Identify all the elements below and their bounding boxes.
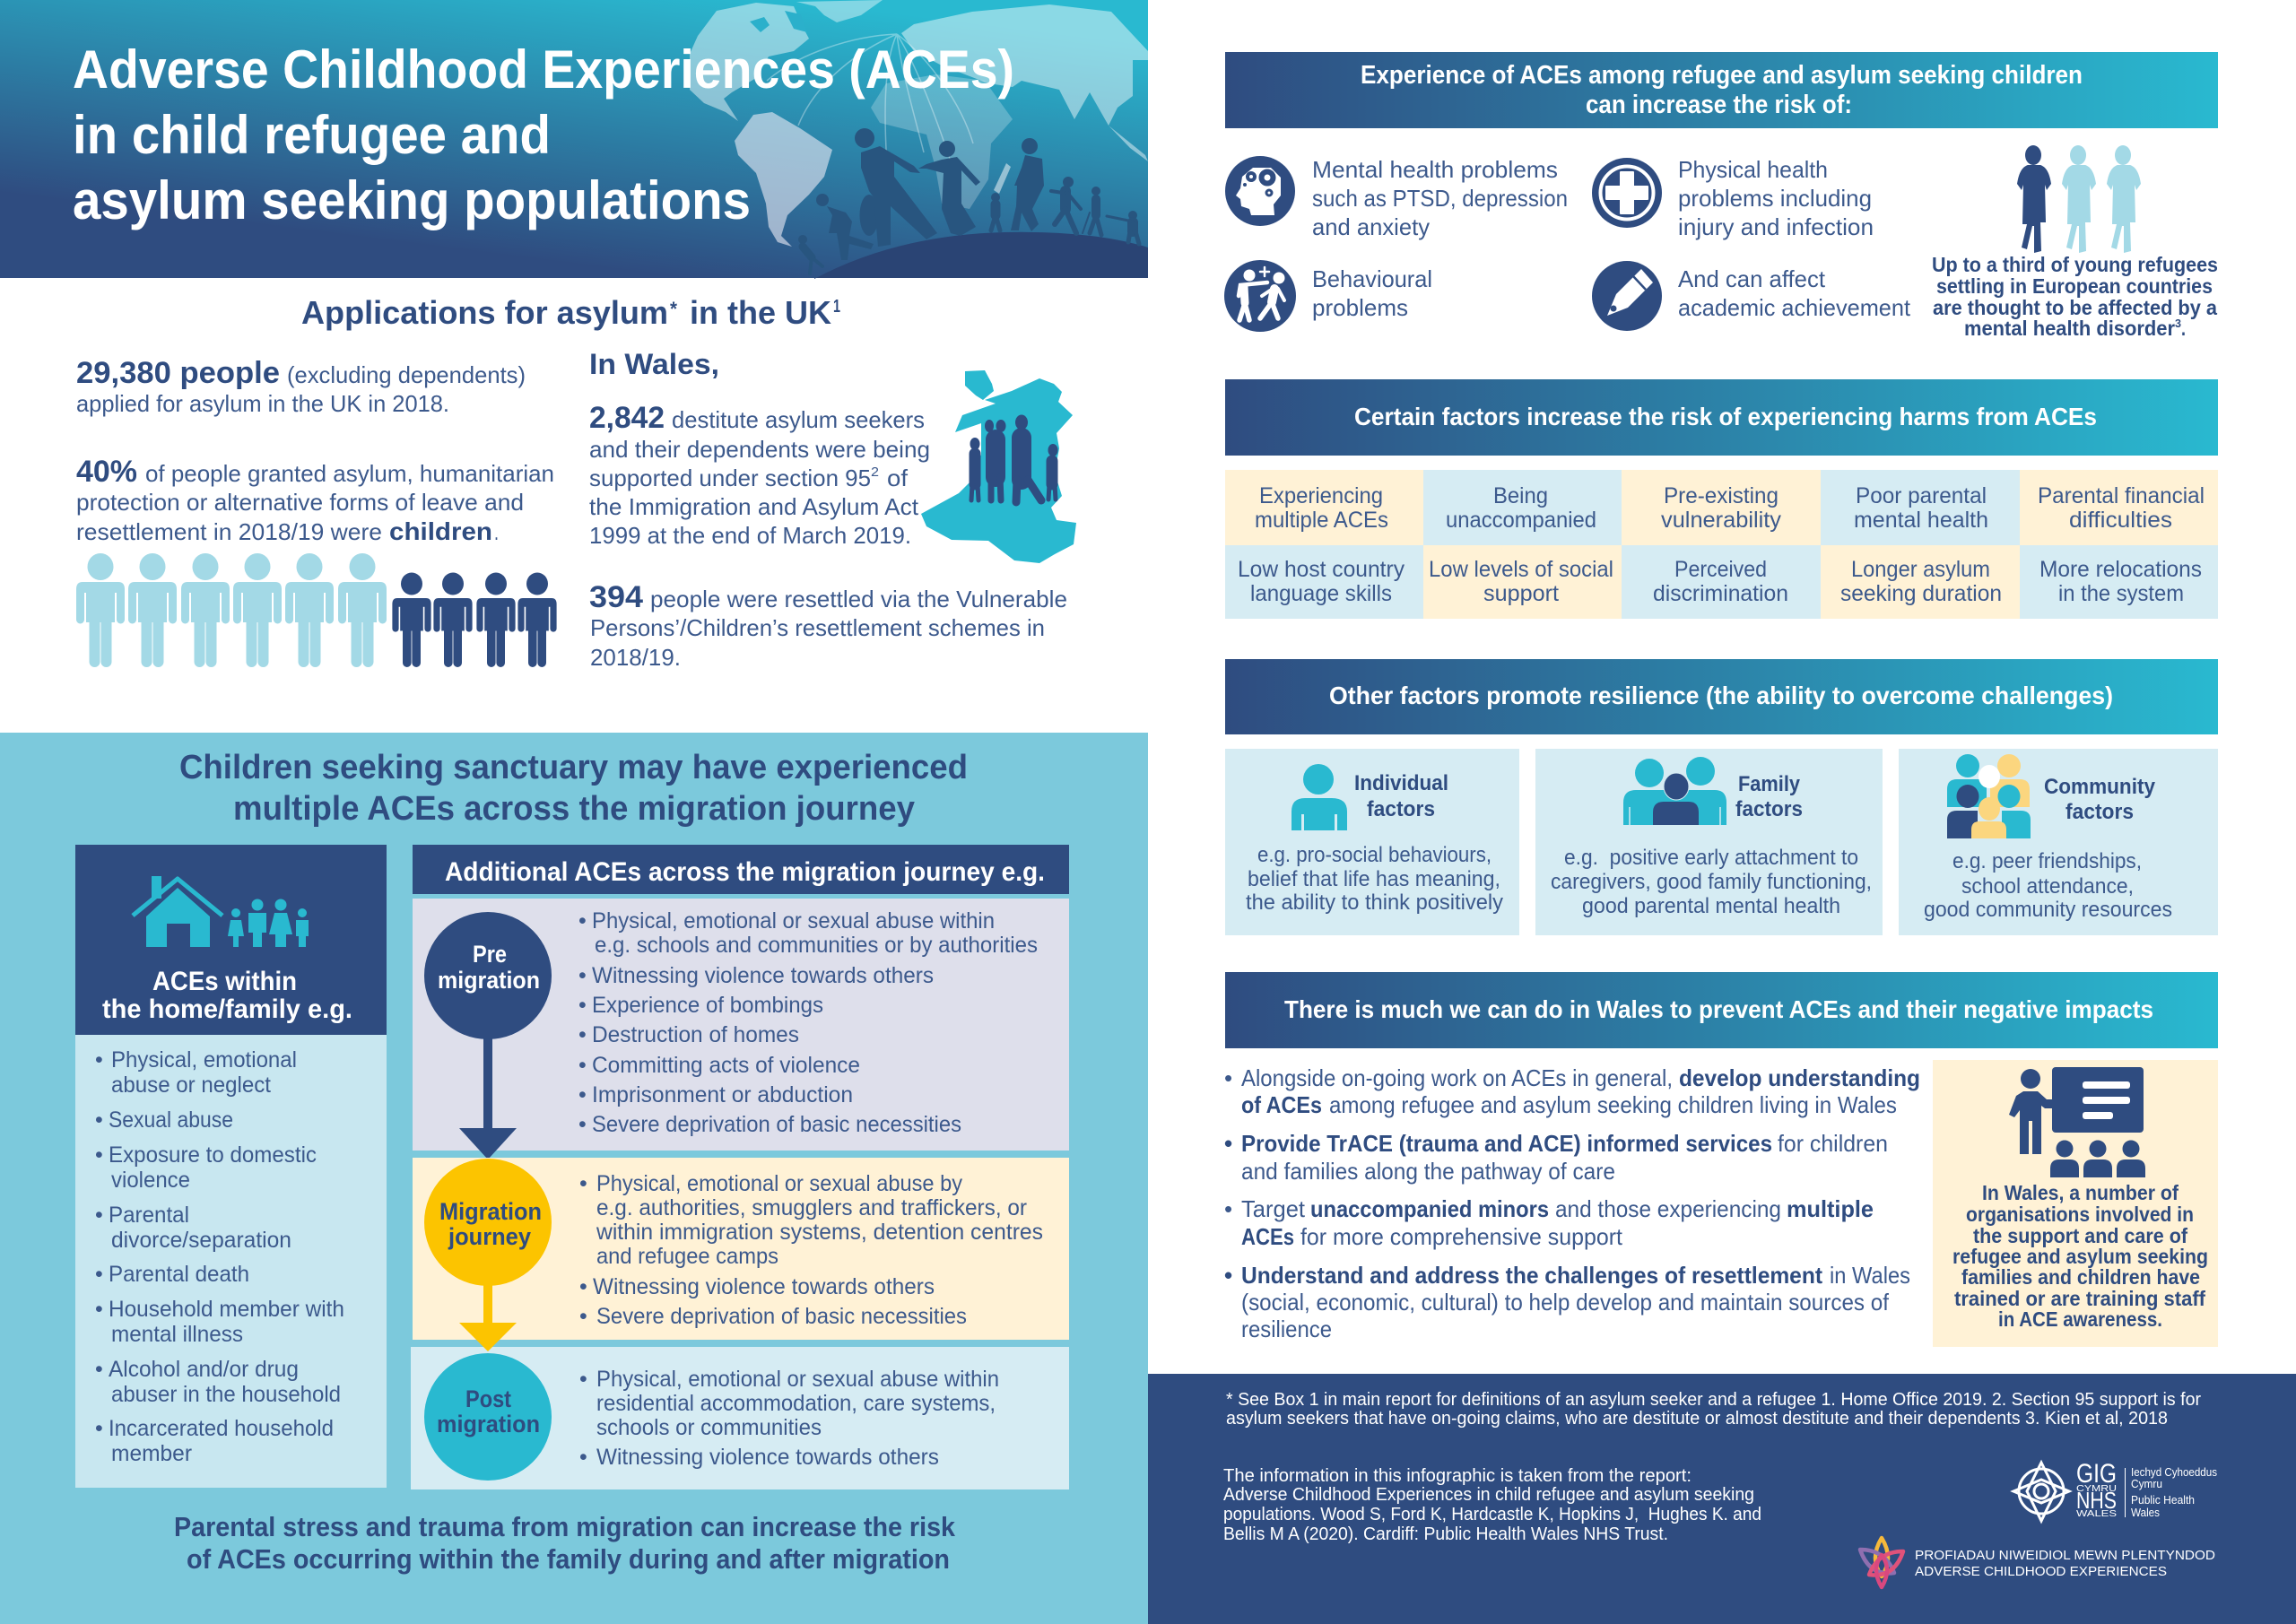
callout text: families and children have [1961,1265,2200,1289]
callout text: refugee and asylum seeking [1952,1245,2208,1268]
arrow [459,1282,517,1351]
description: good parental mental health [1582,894,1840,918]
source reference: Adverse Childhood Experiences in child refugee and asylum seeking [1223,1484,1754,1505]
stat: 394 people resettled: people were resettled via the Vulnerable [650,586,1067,612]
icon: map of Wales with family [921,370,1076,563]
description: good community resources [1924,898,2172,922]
text: physical health [1678,156,1874,240]
label [2044,775,2156,824]
section heading: applications for asylum: in the UK [690,294,831,331]
list: pre migration: • [578,993,587,1018]
list: ACEs within the home/family [75,1035,387,1488]
stat: 2,842 asylum seekers: the Immigration and Asylum Act [589,493,919,520]
source reference [1223,1465,1761,1544]
label: Individual [1354,771,1448,795]
callout: training in Wales [1933,1060,2218,1347]
text: mental health: such as PTSD, depression [1312,185,1568,212]
logo: Adverse Childhood Experiences [1860,1538,2215,1587]
stage circle: pre migration: Pre [473,941,507,968]
panel: individual factors [1225,749,1519,935]
header: what we can do: There is much we can do in Wales to prevent ACEs and their negative impacts [1284,995,2153,1023]
stat: 40% children: 40% [76,455,137,489]
list: ACEs within the home/family: mental illness [111,1322,243,1347]
stage circle: pre migration [424,912,552,1039]
list: actions: of ACEs [1241,1091,1322,1118]
heading: additional ACEs: Additional ACEs across the migration journey e.g. [445,857,1045,887]
label: factors [2066,800,2134,824]
list: actions: • [1224,1195,1232,1222]
icon: three children [2017,145,2141,253]
stat: 40% children: . [494,518,499,545]
list: pre migration: • [578,1112,587,1137]
box heading: ACEs within [152,967,297,996]
list: ACEs within the home/family: • [95,1107,103,1133]
list: actions: (social, economic, cultural) to help develop and maintain sources of [1241,1289,1890,1316]
list: pre migration: Severe deprivation of basic necessities [592,1112,961,1137]
stage circle: migration journey: Migration [439,1198,542,1225]
stat: 40% children: resettlement in 2018/19 were [76,518,382,545]
list: pre migration: Experience of bombings [592,993,823,1018]
grid: risk factors: Parental financial [2038,483,2205,508]
stat: 2,842 asylum seekers: supported under section 95 [589,465,871,491]
footnotes: * See Box 1 in main report for definitions of an asylum seeker and a refugee 1. Home Office 2019. 2. Section 95 support is for [1226,1389,2201,1410]
footer panel [1148,1374,2296,1624]
box heading: the home/family e.g. [102,994,352,1024]
stat: 29,380 people: 29,380 people [76,356,280,390]
stat: 394 people resettled: 394 [589,580,643,614]
list: pre migration: • [578,1053,587,1078]
grid: risk factors [1225,470,2218,619]
list: ACEs within the home/family: Parental [109,1203,189,1228]
list: ACEs within the home/family: Household member with [109,1297,344,1322]
grid: risk factors: Pre-existing [1664,483,1779,508]
list: ACEs within the home/family: abuse or neglect [111,1073,271,1098]
description: e.g. pro-social behaviours, [1257,843,1492,867]
list: ACEs within the home/family: Exposure to domestic [109,1142,317,1168]
text: behavioural: Behavioural [1312,265,1432,292]
list: ACEs within the home/family: • [95,1297,103,1322]
description: e.g. positive early attachment to [1564,846,1858,870]
list: ACEs within the home/family: • [95,1357,103,1382]
footnotes [1226,1389,2201,1429]
list: post migration: • [579,1445,587,1470]
list: ACEs within the home/family: • [95,1047,103,1073]
icon: medical cross [1592,158,1662,228]
callout: third of young refugees: mental health disorder [1964,317,2175,340]
list: actions: in Wales [1830,1262,1910,1289]
title: Adverse Childhood Experiences (ACEs) [73,39,1014,100]
heading: additional ACEs [413,845,1069,894]
stat: 2,842 asylum seekers: 2 [871,465,879,480]
icon: head with gears [1225,156,1295,226]
list: migration journey: and refugee camps [596,1244,778,1269]
title: asylum seeking populations [73,170,751,230]
icon: ten people, four highlighted [76,553,557,667]
list: actions: • [1224,1064,1232,1091]
list: migration journey [579,1171,1043,1329]
description [1924,849,2172,922]
stat: 394 people resettled [589,580,1067,671]
label [1354,771,1448,821]
world map [690,0,1148,247]
list: pre migration: • [578,1022,587,1047]
source reference: populations. Wood S, Ford K, Hardcastle K, Hopkins J, Hughes K. and [1223,1504,1761,1524]
logo: Public Health Wales: WALES [2076,1509,2117,1519]
list: post migration: • [579,1367,587,1392]
logo: Adverse Childhood Experiences: ADVERSE CHILDHOOD EXPERIENCES [1915,1565,2167,1579]
grid: risk factors: language skills [1250,581,1392,606]
logo: Public Health Wales [2013,1459,2217,1521]
stat: 2,842 asylum seekers: 2,842 [589,401,665,435]
list: post migration: Physical, emotional or sexual abuse within [596,1367,999,1392]
list: pre migration: • [578,963,587,988]
label: factors [1735,797,1803,821]
footnotes: asylum seekers that have on-going claims, who are destitute or almost destitute and their dependents 3. Kien et al, 2018 [1226,1408,2168,1429]
list: actions: ACEs [1241,1223,1294,1250]
list: actions: Provide TrACE (trauma and ACE) informed services [1241,1130,1772,1157]
stage circle: pre migration: migration [438,967,540,994]
label: Community [2044,775,2156,799]
section heading: applications for asylum: * [670,298,677,320]
text: physical health: Physical health [1678,156,1828,183]
stat: 394 people resettled: Persons’/Children’s resettlement schemes in [590,614,1045,641]
logo: Public Health Wales: CYMRU [2076,1484,2117,1494]
callout: third of young refugees: . [2181,317,2186,340]
list: actions: and families along the pathway of care [1241,1158,1615,1185]
icon: fighting figures [1224,260,1296,332]
callout text: in ACE awareness. [1998,1307,2162,1331]
stage circle: post migration [424,1353,552,1481]
closing statement: of ACEs occurring within the family during and after migration [187,1543,950,1575]
section heading: applications for asylum: Applications for asylum [301,294,668,331]
description: e.g. peer friendships, [1952,849,2142,873]
description: the ability to think positively [1246,890,1503,915]
grid: risk factors: Being [1493,483,1548,508]
header: resilience [1225,659,2218,734]
grid: risk factors: difficulties [2069,508,2172,533]
list: ACEs within the home/family: abuser in the household [111,1382,341,1407]
list: pre migration [578,908,1038,1137]
list: migration journey: • [579,1304,587,1329]
callout text: the support and care of [1973,1224,2187,1247]
label: factors [1367,797,1435,821]
stage circle: migration journey [424,1159,552,1286]
panel: migration journey [0,733,1148,1624]
panel heading [179,749,968,828]
header: resilience: Other factors promote resilience (the ability to overcome challenges) [1329,682,2113,709]
list: ACEs within the home/family: divorce/separation [111,1228,291,1253]
logo: Public Health Wales: Iechyd Cyhoeddus [2131,1465,2217,1479]
list: pre migration: e.g. schools and communities or by authorities [595,933,1038,958]
list: ACEs within the home/family: • [95,1203,103,1228]
stat: 29,380 people: applied for asylum in the UK in 2018. [76,390,449,417]
callout: third of young refugees [1932,253,2218,340]
list: pre migration: Physical, emotional or sexual abuse within [592,908,995,934]
stat: 2,842 asylum seekers: of [887,465,909,491]
logo: Public Health Wales: NHS [2076,1487,2117,1514]
list: ACEs within the home/family: • [95,1262,103,1287]
source reference: Bellis M A (2020). Cardiff: Public Health Wales NHS Trust. [1223,1524,1668,1544]
list: actions [1224,1064,1920,1342]
grid: risk factors: Low levels of social [1429,557,1613,582]
list: ACEs within the home/family: Sexual abuse [109,1107,233,1133]
text: mental health: and anxiety [1312,213,1430,240]
icon: presenter with audience [2009,1067,2145,1177]
list: pre migration: Committing acts of violence [592,1053,860,1078]
title: in child refugee and [73,105,551,165]
grid: risk factors: seeking duration [1840,581,2002,606]
list: migration journey: Severe deprivation of basic necessities [596,1304,967,1329]
grid: risk factors: Experiencing [1259,483,1383,508]
logo: Public Health Wales: Public Health [2131,1493,2195,1507]
panel: family factors [1535,749,1883,935]
grid: risk factors: support [1483,581,1559,606]
list: post migration [579,1367,999,1470]
text: physical health: problems including [1678,185,1872,212]
stage circle: migration journey: journey [448,1223,531,1250]
heading: In Wales: In Wales, [589,348,719,380]
grid: risk factors: unaccompanied [1446,508,1596,533]
header: risk factors [1225,379,2218,456]
list: ACEs within the home/family: Parental death [109,1262,249,1287]
callout: third of young refugees: Up to a third of young refugees [1932,253,2218,276]
list: actions: and those experiencing [1555,1195,1781,1222]
description: caregivers, good family functioning, [1551,870,1872,894]
panel: migration journey stage [413,1158,1069,1351]
list: ACEs within the home/family: • [95,1142,103,1168]
stat: 29,380 people [76,356,526,417]
list: actions: Alongside on-going work on ACEs in general, [1241,1064,1673,1091]
list: actions: among refugee and asylum seeking children living in Wales [1329,1091,1897,1118]
text: academic: And can affect [1678,265,1826,292]
icon: individual [1292,764,1347,830]
callout text [1952,1181,2208,1331]
callout text: In Wales, a number of [1982,1181,2179,1204]
list: migration journey: Witnessing violence towards others [593,1274,935,1299]
list: actions: for children [1778,1130,1888,1157]
stat: 2,842 asylum seekers: and their dependents were being [589,436,930,463]
list: actions: Understand and address the challenges of resettlement [1241,1262,1822,1289]
description: belief that life has meaning, [1248,867,1500,891]
logo: Public Health Wales: Cymru [2131,1477,2162,1490]
grid: risk factors: More relocations [2039,557,2202,582]
grid: risk factors: in the system [2058,581,2184,606]
panel heading: Children seeking sanctuary may have experienced [179,749,968,786]
icon: pencil [1592,261,1662,331]
panel: pre migration [413,899,1069,1159]
text: mental health [1312,156,1568,240]
description [1246,843,1503,915]
list: actions: develop understanding [1679,1064,1920,1091]
list: migration journey: • [579,1274,587,1299]
stat: 29,380 people: (excluding dependents) [287,361,526,388]
list: migration journey: • [579,1171,587,1196]
list: ACEs within the home/family: Physical, emotional [111,1047,297,1073]
list: pre migration: Imprisonment or abduction [592,1082,853,1107]
list: migration journey: e.g. authorities, smugglers and traffickers, or [596,1195,1027,1220]
header: risk of: can increase the risk of: [1586,91,1852,119]
closing statement: Parental stress and trauma from migration can increase the risk [174,1511,956,1542]
grid: risk factors: multiple ACEs [1255,508,1388,533]
header: what we can do [1225,972,2218,1048]
stat: 2,842 asylum seekers [589,401,930,549]
stage circle: post migration: migration [437,1411,540,1437]
list: pre migration: Destruction of homes [592,1022,799,1047]
logo: Adverse Childhood Experiences: PROFIADAU NIWEIDIOL MEWN PLENTYNDOD [1915,1549,2215,1563]
list: pre migration: Witnessing violence towards others [592,963,934,988]
list: actions: • [1224,1130,1232,1157]
header: risk factors: Certain factors increase the risk of experiencing harms from ACEs [1354,403,2097,430]
stat: 2,842 asylum seekers: destitute asylum seekers [672,406,925,433]
list: migration journey: Physical, emotional or sexual abuse by [596,1171,962,1196]
list: actions: resilience [1241,1316,1332,1342]
stat: 394 people resettled: 2018/19. [590,644,681,671]
grid: risk factors: mental health [1854,508,1988,533]
list: ACEs within the home/family: • [95,1416,103,1441]
box heading [102,967,352,1024]
logo: Public Health Wales: GIG [2076,1459,2117,1489]
stat: 40% children: of people granted asylum, humanitarian [145,460,554,487]
list: actions: multiple [1787,1195,1874,1222]
icon: house and family [133,876,309,947]
list: ACEs within the home/family: Alcohol and/or drug [109,1357,299,1382]
text: physical health: injury and infection [1678,213,1874,240]
title [73,39,1014,230]
stat: 40% children: protection or alternative forms of leave and [76,489,524,516]
list: actions: unaccompanied minors [1310,1195,1549,1222]
list: migration journey: within immigration systems, detention centres [596,1220,1043,1245]
label [1735,772,1803,821]
list: post migration: schools or communities [596,1415,822,1440]
arrow [459,1036,517,1159]
list: pre migration: • [578,908,587,934]
description [1551,846,1872,918]
stat: 2,842 asylum seekers: 1999 at the end of March 2019. [589,522,911,549]
list: actions: Target [1241,1195,1306,1222]
text: academic [1678,265,1911,321]
list: actions: for more comprehensive support [1300,1223,1623,1250]
list: post migration: residential accommodation, care systems, [596,1391,996,1416]
source reference: The information in this infographic is taken from the report: [1223,1465,1692,1486]
grid: risk factors: Longer asylum [1851,557,1990,582]
callout text: trained or are training staff [1954,1287,2205,1310]
header: risk of: Experience of ACEs among refugee and asylum seeking children [1361,61,2083,90]
icon: community [1947,754,2031,838]
text: behavioural [1312,265,1432,321]
panel: ACEs within the home/family header [75,845,387,1035]
list: ACEs within the home/family: member [111,1441,192,1466]
silhouettes of people walking on a hill [798,128,1148,279]
list: pre migration: • [578,1082,587,1107]
grid: risk factors: Poor parental [1856,483,1987,508]
callout: third of young refugees: settling in European countries [1936,274,2213,298]
panel heading: multiple ACEs across the migration journey [233,790,915,828]
list: ACEs within the home/family: Incarcerated household [109,1416,334,1441]
callout text: organisations involved in [1966,1203,2194,1226]
section heading: applications for asylum: 1 [833,297,840,317]
icon: family [1623,757,1726,825]
panel: post migration [411,1347,1069,1489]
banner [0,0,1148,279]
text: behavioural: problems [1312,294,1408,321]
closing statement [174,1511,956,1575]
description: school attendance, [1961,874,2134,899]
section heading: applications for asylum [301,294,840,331]
grid: risk factors: Low host country [1238,557,1405,582]
list: post migration: Witnessing violence towards others [596,1445,939,1470]
callout: third of young refugees: are thought to be affected by a [1933,296,2218,319]
label: Family [1738,772,1801,796]
stage circle: post migration: Post [465,1385,511,1412]
panel: community factors [1899,749,2218,935]
header: risk of [1225,52,2218,128]
list: actions: • [1224,1262,1232,1289]
callout: third of young refugees: 3 [2175,317,2181,330]
logo: Public Health Wales: Wales [2131,1506,2160,1519]
list: ACEs within the home/family: violence [111,1168,190,1193]
stat: 40% children [76,455,554,545]
grid: risk factors: Perceived [1674,557,1767,582]
grid: risk factors: discrimination [1653,581,1788,606]
text: mental health: Mental health problems [1312,156,1558,183]
grid: risk factors: vulnerability [1661,508,1781,533]
text: academic: academic achievement [1678,294,1911,321]
stat: 40% children: children [389,517,492,545]
